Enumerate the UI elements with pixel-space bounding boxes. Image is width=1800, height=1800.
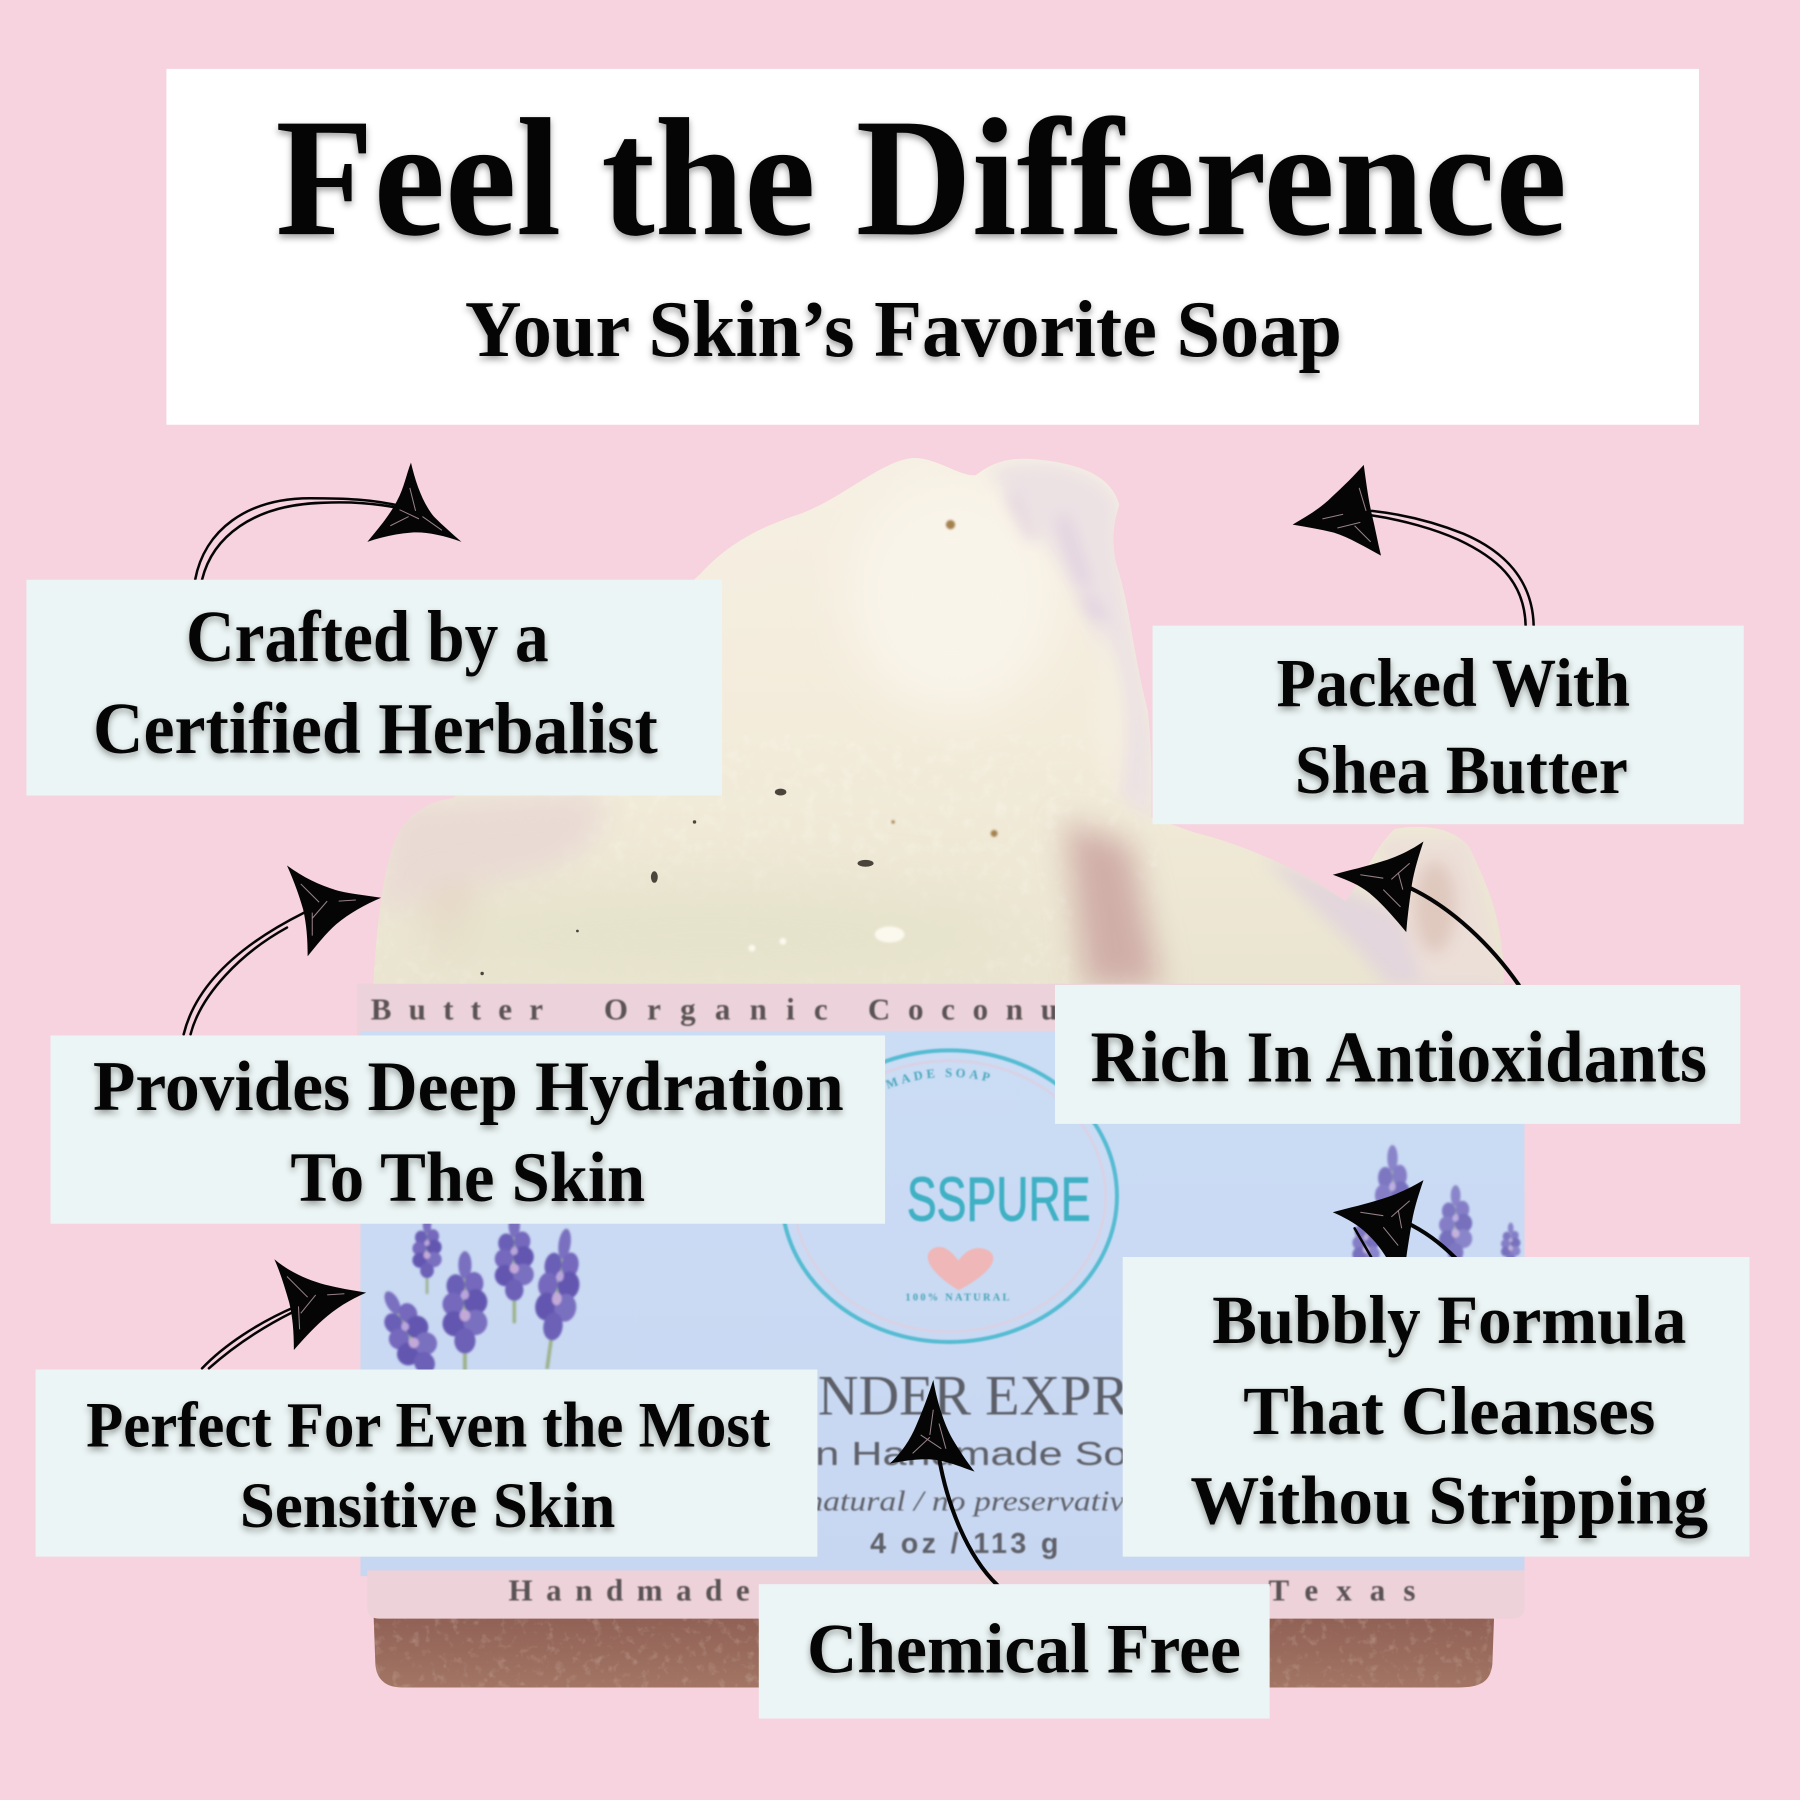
product name and details: all natural / no preservatives xyxy=(762,1486,1153,1518)
product name and details: Artisan Handmade Soap xyxy=(705,1436,1176,1473)
arrow: rich in antioxidants xyxy=(1333,841,1519,985)
subtitle: Your Skin’s Favorite Soap xyxy=(465,285,1342,374)
label band text xyxy=(371,991,1415,1607)
soap specks xyxy=(480,789,874,975)
arrow: provides deep hydration xyxy=(184,866,381,1034)
callout: bubbly formula: Bubbly Formula xyxy=(1212,1282,1686,1358)
label: top band xyxy=(357,984,1524,1037)
label: blue panel xyxy=(360,1031,1524,1576)
callout: bubbly formula: That Cleanses xyxy=(1243,1373,1655,1449)
photo: soap bar with paper label xyxy=(316,458,1536,1718)
soap base xyxy=(373,1601,1495,1688)
callout: bubbly formula: Withou Stripping xyxy=(1190,1462,1708,1538)
callout: crafted by a certified herbalist: Certified Herbalist xyxy=(93,688,658,769)
lavender illustration, left xyxy=(368,1214,587,1404)
product name and details: 4 oz / 113 g xyxy=(870,1528,1058,1560)
callout: chemical free xyxy=(759,1584,1270,1718)
arrow: chemical free xyxy=(890,1380,998,1585)
callout: packed with shea butter xyxy=(1153,626,1744,824)
callout: rich in antioxidants: Rich In Antioxidants xyxy=(1091,1016,1707,1097)
callout: crafted by a certified herbalist xyxy=(26,580,722,796)
logo badge: SSPURE xyxy=(907,1165,1091,1234)
logo badge: 100% NATURAL xyxy=(905,1293,1012,1304)
label: bottom band xyxy=(367,1570,1524,1619)
arrow: perfect for sensitive skin xyxy=(202,1259,366,1368)
callout: provides deep hydration: Provides Deep Hydration xyxy=(93,1048,844,1126)
callout: packed with shea butter: Packed With xyxy=(1277,645,1630,721)
arrow: bubbly formula xyxy=(1333,1180,1456,1258)
arrow: packed with shea butter xyxy=(1293,465,1534,626)
lavender illustration, right xyxy=(1352,1145,1520,1288)
callout: perfect for sensitive skin xyxy=(36,1370,817,1557)
label band text: Butter xyxy=(371,991,543,1026)
callout: chemical free: Chemical Free xyxy=(807,1611,1241,1689)
arrow: crafted by a certified herbalist xyxy=(195,463,461,580)
callout: perfect for sensitive skin: Sensitive Skin xyxy=(240,1470,615,1541)
callout: provides deep hydration: To The Skin xyxy=(290,1139,645,1217)
product name and details xyxy=(675,1364,1226,1560)
logo badge: HANDMADE SOAP xyxy=(885,1068,991,1090)
title: Feel the Difference xyxy=(276,84,1567,271)
soap top, rough cut xyxy=(356,448,1515,999)
label band text: Handmade xyxy=(509,1572,750,1607)
callout: bubbly formula xyxy=(1123,1257,1749,1557)
label band text: Coconut xyxy=(868,991,1087,1026)
label band text: Texas xyxy=(1268,1572,1415,1607)
callout: perfect for sensitive skin: Perfect For Even the Most xyxy=(86,1389,771,1460)
product name and details: LAVENDER EXPRESS xyxy=(675,1364,1226,1427)
callout: provides deep hydration xyxy=(51,1035,885,1224)
callout: crafted by a certified herbalist: Crafted by a xyxy=(186,596,549,677)
label band text: Organic xyxy=(604,991,828,1026)
logo badge xyxy=(782,1048,1120,1345)
callout: rich in antioxidants xyxy=(1055,985,1740,1124)
callout: packed with shea butter: Shea Butter xyxy=(1295,732,1628,808)
title panel xyxy=(166,69,1699,425)
